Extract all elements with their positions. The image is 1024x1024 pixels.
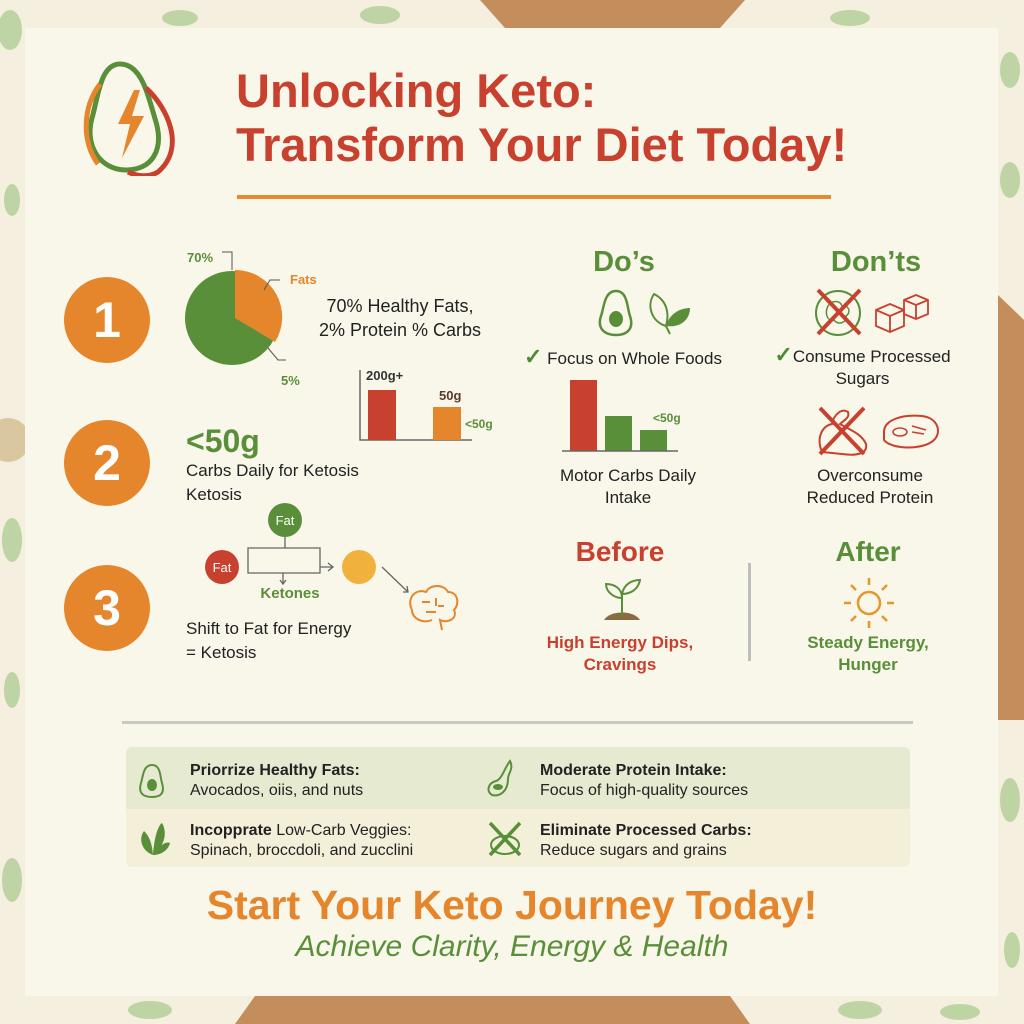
text: after: Hunger	[838, 655, 898, 674]
pie chart: Fats	[290, 272, 317, 287]
panel: dos: Do’s	[593, 246, 655, 278]
text: after: Steady Energy,	[807, 633, 929, 652]
tip: healthy fats	[139, 762, 363, 799]
bar chart: carbs intake	[562, 380, 681, 452]
text: shift: Shift to Fat for Energy	[186, 619, 351, 638]
text: consume: Sugars	[836, 369, 889, 388]
step 1: 1	[93, 292, 121, 348]
text: before: High Energy Dips,	[547, 633, 693, 652]
panel: tips	[126, 747, 910, 867]
tip: protein: Moderate Protein Intake:	[540, 762, 727, 779]
small bar chart: 200g+	[366, 368, 404, 383]
step 2	[64, 420, 150, 506]
text: consume: ✓Consume Processed	[774, 342, 951, 367]
tip: veggies: Incopprate Low-Carb Veggies:	[190, 822, 411, 839]
tip: eliminate	[488, 822, 752, 859]
text: macros: 70% Healthy Fats,	[326, 296, 474, 316]
tip: healthy fats: Avocados, oiis, and nuts	[190, 782, 363, 799]
tip: veggies	[141, 822, 413, 859]
step 1	[64, 277, 150, 363]
small bar chart: 50g	[439, 388, 461, 403]
small bar chart: <50g	[465, 417, 493, 431]
tip: eliminate: Eliminate Processed Carbs:	[540, 822, 752, 839]
text: carbs: <50g	[186, 423, 260, 459]
icon: sun	[844, 578, 894, 628]
title: Transform Your Diet Today!	[236, 118, 847, 171]
call to action: Start Your Keto Journey Today!	[207, 882, 817, 928]
step 3	[64, 565, 150, 651]
text: macros	[319, 296, 481, 340]
flow diagram: Fat	[213, 560, 232, 575]
text: motor carbs: Motor Carbs Daily	[560, 466, 696, 485]
text: macros: 2% Protein % Carbs	[319, 320, 481, 340]
text: shift	[186, 619, 352, 662]
text: after	[807, 633, 929, 674]
icon: avocado & spinach	[598, 290, 690, 336]
icon: crossed broccoli & sugar cubes	[815, 288, 929, 336]
text: motor carbs	[560, 466, 696, 507]
panel: before: Before	[576, 536, 664, 567]
tip: veggies: Spinach, broccdoli, and zucclini	[190, 842, 413, 859]
tip: protein: Focus of high-quality sources	[540, 782, 748, 799]
bar chart: carbs intake: <50g	[653, 411, 681, 425]
flow diagram: Ketones	[260, 585, 320, 602]
title: Unlocking Keto:	[236, 64, 596, 117]
tip: healthy fats: Priorrize Healthy Fats:	[190, 762, 360, 779]
text: consume	[774, 342, 951, 388]
icon: crossed muscle & steak	[818, 406, 939, 456]
pie chart	[185, 250, 317, 388]
panel: donts: Don’ts	[831, 246, 921, 278]
small bar chart	[359, 368, 493, 441]
pie chart: 5%	[281, 373, 300, 388]
tagline: Achieve Clarity, Energy & Health	[296, 930, 728, 963]
text: carbs: Carbs Daily for Ketosis	[186, 461, 359, 480]
text: before	[547, 633, 693, 674]
text: carbs: Ketosis	[186, 485, 242, 504]
text: focus: ✓ Focus on Whole Foods	[524, 344, 722, 369]
panel: after: After	[835, 536, 901, 567]
pie chart: 70%	[187, 250, 213, 265]
tip: protein	[487, 759, 748, 799]
flow diagram	[205, 503, 458, 630]
text: overconsume: Reduced Protein	[807, 488, 933, 507]
text: motor carbs: Intake	[605, 488, 651, 507]
text: overconsume: Overconsume	[817, 466, 923, 485]
text: overconsume	[807, 466, 933, 507]
logo	[84, 62, 175, 176]
icon: sprout	[604, 579, 642, 620]
step 2: 2	[93, 435, 121, 491]
flow diagram: Fat	[276, 513, 295, 528]
title	[236, 64, 847, 171]
text: shift: = Ketosis	[186, 643, 256, 662]
text: before: Cravings	[584, 655, 656, 674]
text: carbs	[186, 423, 359, 504]
tip: eliminate: Reduce sugars and grains	[540, 842, 727, 859]
step 3: 3	[93, 580, 121, 636]
